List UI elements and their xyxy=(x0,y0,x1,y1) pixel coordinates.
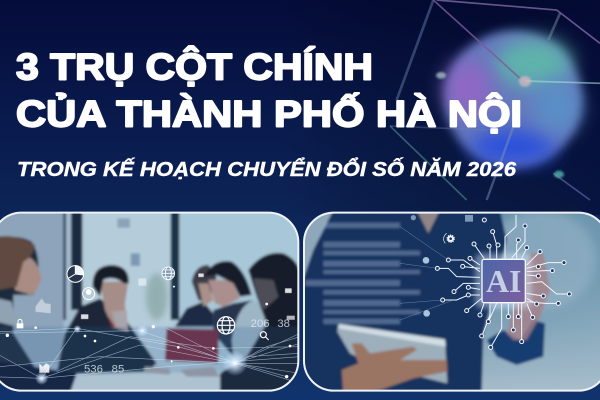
glowing nodes xyxy=(6,286,291,385)
photo number labels: 536 xyxy=(84,364,103,376)
photo number labels: 206 xyxy=(251,318,270,330)
right photo border xyxy=(304,213,600,391)
icon: pie chart xyxy=(67,266,84,282)
photo scene xyxy=(0,210,302,393)
icon: globe lower xyxy=(217,317,235,334)
icon: AI chip: AI xyxy=(486,263,521,299)
circuit nodes xyxy=(435,218,571,349)
icon: padlock xyxy=(17,319,23,328)
title xyxy=(16,46,522,134)
decorative glowing cube and orb xyxy=(390,0,600,200)
left photo border xyxy=(0,213,298,391)
connected light dots xyxy=(411,215,473,317)
photo number labels: 85 xyxy=(112,364,124,376)
light nodes xyxy=(436,72,564,178)
subtitle: TRONG KẾ HOẠCH CHUYỂN ĐỔI SỐ NĂM 2026 xyxy=(17,157,517,181)
photo scene xyxy=(302,210,600,393)
circuit traces xyxy=(437,215,569,347)
icon: AI chip xyxy=(475,253,532,308)
panel: left photo, business team with data network xyxy=(0,210,302,393)
icon: gear xyxy=(444,233,454,243)
cube edges xyxy=(390,0,600,200)
panel: right photo, person with tablet and AI chip xyxy=(302,210,600,393)
icon: magnifier xyxy=(260,332,269,340)
photo number labels: 38 xyxy=(277,318,290,330)
icon: user badge xyxy=(83,288,95,300)
icon: globe top xyxy=(162,267,175,280)
icon: small charts xyxy=(35,273,295,373)
title line 2: CỦA THÀNH PHỐ HÀ NỘI xyxy=(16,92,522,134)
photo number labels xyxy=(84,318,290,376)
title line 1: 3 TRỤ CỘT CHÍNH xyxy=(16,46,373,88)
orb xyxy=(445,31,582,167)
network lines xyxy=(0,328,300,383)
thin link lines xyxy=(400,227,453,320)
